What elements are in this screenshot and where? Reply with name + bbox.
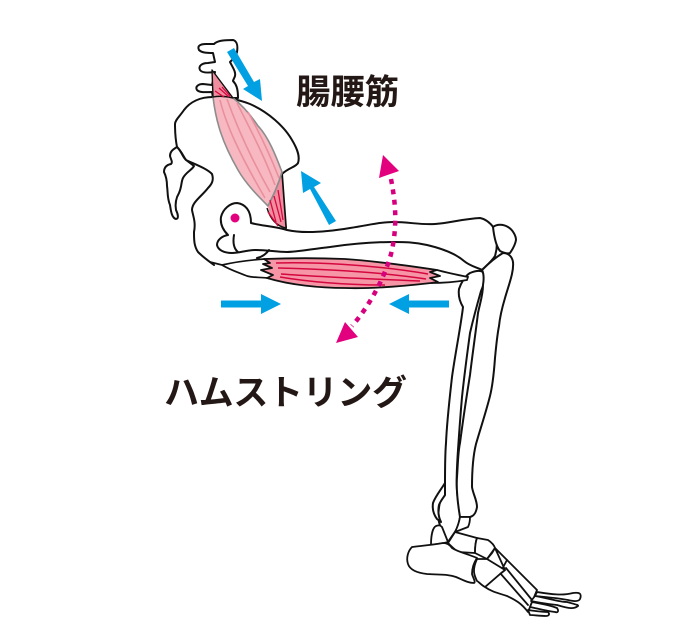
muscle: iliopsoas xyxy=(212,70,286,228)
cuneiform xyxy=(474,559,505,587)
tibia xyxy=(457,253,513,517)
hamstring belly xyxy=(261,258,440,288)
patella xyxy=(493,225,516,253)
arrow: blue left (hamstring) xyxy=(389,294,449,314)
navicular xyxy=(475,538,495,559)
metatarsals xyxy=(485,548,537,612)
heel xyxy=(407,543,477,583)
arrow: blue right (hamstring) xyxy=(221,294,281,314)
muscle: hamstring xyxy=(210,258,468,288)
hamstring tendons xyxy=(210,259,468,283)
label: iliopsoas: 腸腰筋 xyxy=(296,74,399,112)
arrow: magenta dotted pelvic tilt arc xyxy=(336,155,399,343)
skeleton xyxy=(164,40,581,616)
talus neck xyxy=(431,525,448,545)
iliopsoas upper tendon xyxy=(212,70,233,98)
foot xyxy=(407,517,581,616)
lumbar vertebrae xyxy=(196,40,238,98)
arrow: blue to lower right (spine) xyxy=(227,48,262,101)
ankle piece xyxy=(455,517,470,532)
pelvis outline xyxy=(175,97,299,265)
pelvis fill xyxy=(175,97,299,265)
lateral malleolus xyxy=(433,483,445,522)
femur xyxy=(217,203,497,270)
label: hamstring: ハムストリング xyxy=(164,374,407,413)
arrow: blue to upper left (thigh) xyxy=(301,171,336,225)
iliopsoas belly xyxy=(213,96,282,206)
pink dot: hip joint xyxy=(230,214,240,222)
sacrum xyxy=(164,147,194,219)
fibula-side lower leg bone xyxy=(438,271,485,542)
iliopsoas lower tendon xyxy=(268,172,286,228)
toes xyxy=(535,592,581,601)
